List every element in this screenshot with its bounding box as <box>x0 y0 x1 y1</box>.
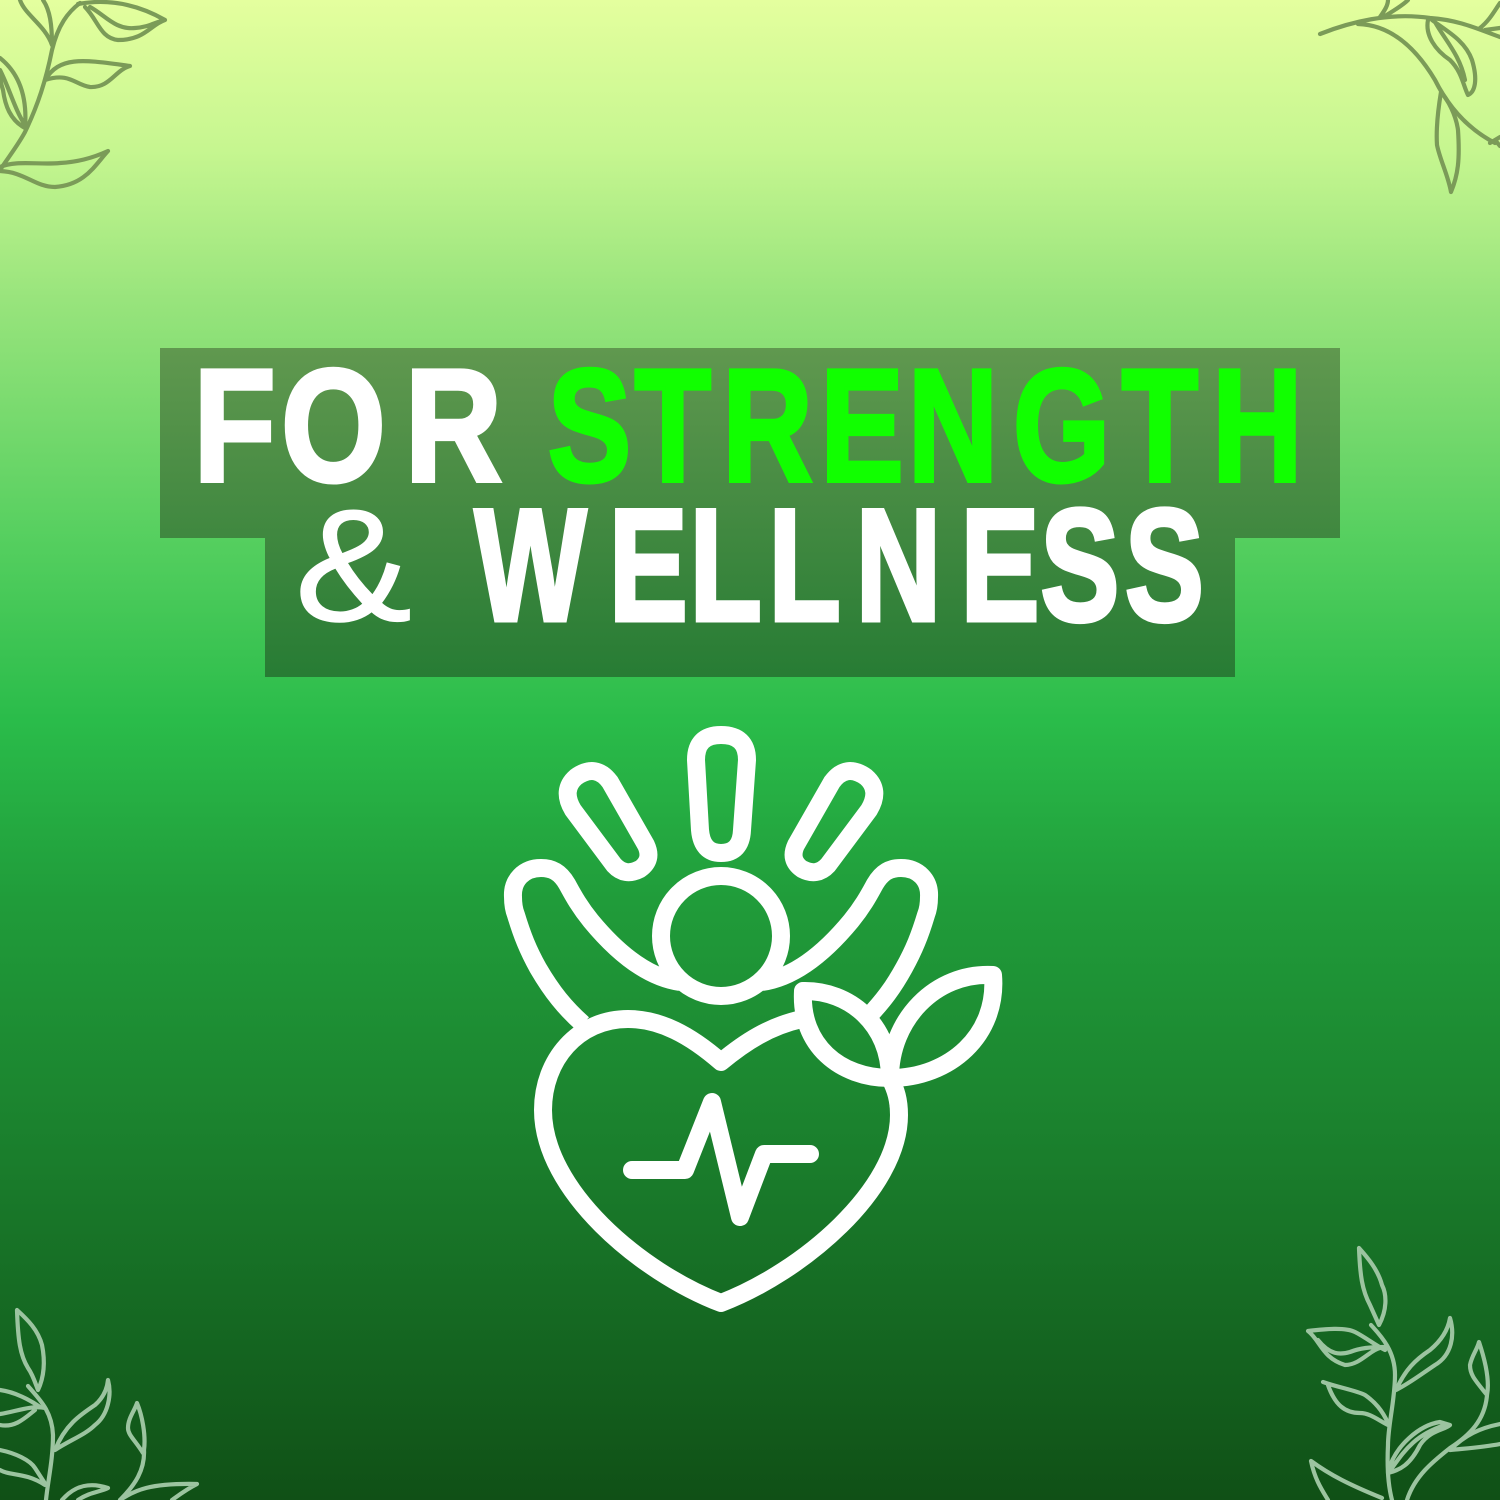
title line 2: Wellness: WELLNESS <box>475 476 1204 654</box>
decoration: top-right leaves <box>1320 0 1500 192</box>
decoration: bottom-left leaves <box>0 1310 197 1500</box>
icon: right arm <box>762 868 929 1017</box>
decoration: top-left leaves <box>0 0 165 187</box>
title banner background <box>160 348 1340 677</box>
icon: left arm <box>513 868 680 1024</box>
title line 2: ampersand: & <box>295 476 412 655</box>
title line 1: Strength: STRENGTH <box>548 337 1302 515</box>
icon: head <box>661 876 781 996</box>
icon: left energy ray <box>568 771 648 872</box>
icon: heartbeat pulse <box>632 1102 810 1217</box>
icon: large leaf <box>890 975 993 1078</box>
icon: small leaf <box>803 991 890 1078</box>
icon: right energy ray <box>794 771 874 872</box>
title <box>194 337 1302 655</box>
icon: centre energy ray <box>696 735 747 853</box>
title line 1: For: FOR <box>194 337 502 515</box>
icon: person with heart and leaves <box>513 735 993 1303</box>
decoration: bottom-right leaves <box>1308 1248 1500 1500</box>
icon: heart <box>543 1019 899 1303</box>
